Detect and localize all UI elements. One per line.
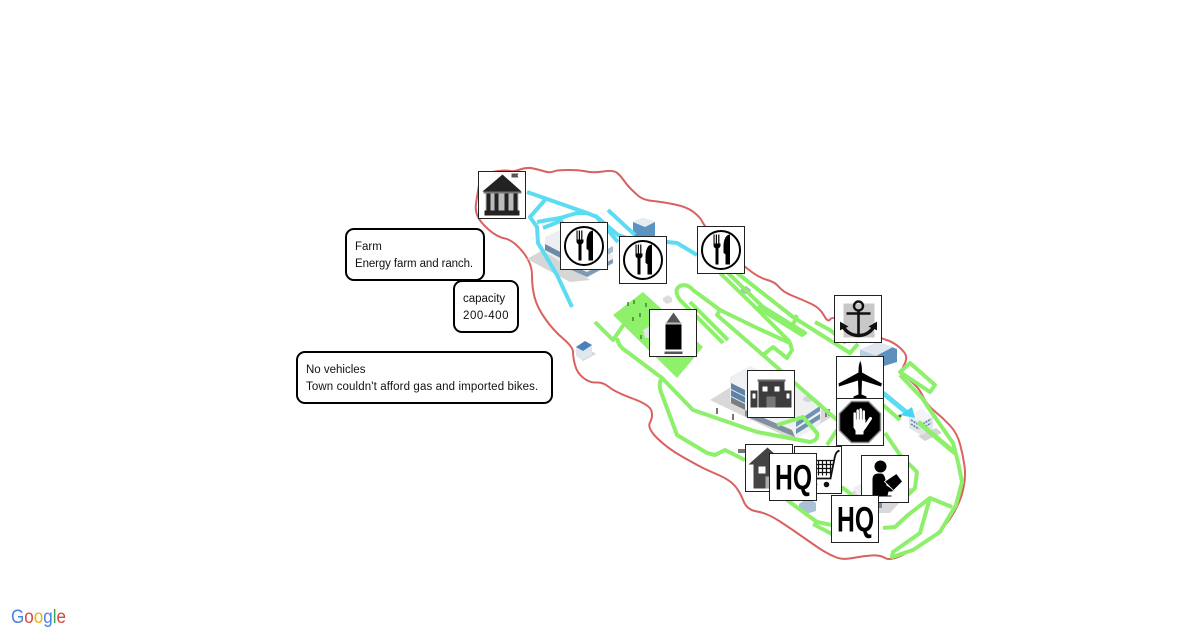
callout: no vehicles: No vehicles [306, 364, 365, 376]
icon: home [746, 444, 792, 492]
building: south cottage [738, 449, 816, 514]
cycle routes: green network [595, 273, 962, 557]
callout: capacity: capacity [463, 292, 505, 304]
icon: reader [862, 456, 908, 502]
icon: museum [478, 172, 526, 218]
icon: anchor [834, 296, 882, 342]
icon: stop hand [836, 398, 884, 446]
icon: headquarters two: HQ [837, 500, 874, 540]
building: north complex [527, 230, 613, 282]
google logo: Google [11, 607, 66, 628]
callout: no vehicles: Town couldn't afford gas and imported bikes. [306, 380, 538, 392]
icon: town hall [748, 370, 794, 418]
building: north tower [633, 218, 655, 236]
building: small shed east [741, 286, 751, 294]
callout: farm [345, 228, 485, 281]
icon: restaurant two [620, 236, 666, 284]
building: east block [909, 409, 942, 441]
building: small shed [663, 295, 672, 304]
icon: headquarters one [770, 454, 816, 500]
farm field [613, 292, 703, 378]
building: blue house [576, 341, 596, 361]
callout: no vehicles [296, 351, 553, 404]
icon: restaurant three [698, 226, 744, 274]
callout: farm: Farm [355, 240, 382, 252]
cycle routes: west network [527, 192, 697, 307]
icon: headquarters two [832, 496, 878, 542]
icon: airplane [836, 356, 884, 404]
icon: shopping cart [794, 446, 842, 494]
building: south campus [847, 483, 913, 513]
icon: headquarters one: HQ [775, 458, 812, 498]
icon: monument [650, 310, 696, 356]
cycle route: east spur [883, 393, 915, 418]
callout: capacity [453, 280, 519, 333]
building: port offices [860, 342, 897, 371]
building: central campus [710, 366, 835, 440]
icon: restaurant one [560, 222, 608, 270]
island outline [476, 168, 965, 559]
callout: farm: Energy farm and ranch. [355, 258, 473, 270]
callout: capacity: 200-400 [463, 310, 509, 322]
